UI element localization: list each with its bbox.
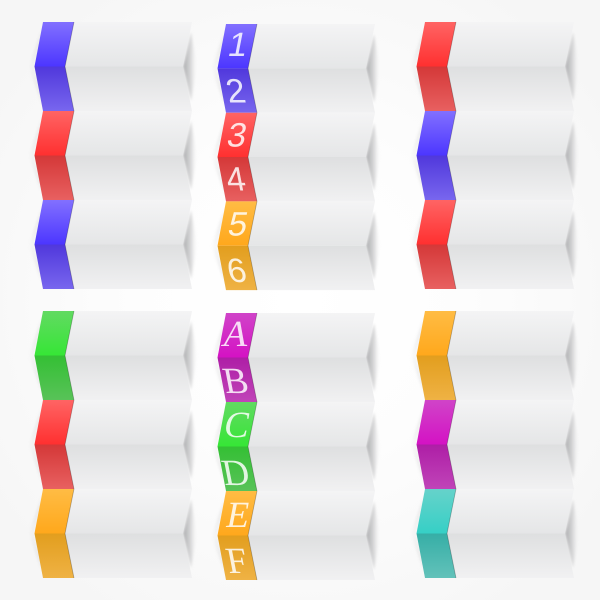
number 1: 1 bbox=[225, 26, 251, 64]
number 4: 4 bbox=[223, 161, 249, 198]
letter C: C bbox=[221, 405, 253, 446]
number 5: 5 bbox=[225, 206, 251, 243]
number 3: 3 bbox=[224, 117, 250, 154]
letter D: D bbox=[218, 453, 253, 494]
panel: numbered list, top centre bbox=[211, 24, 380, 290]
number 6: 6 bbox=[224, 252, 250, 290]
panel: red blue red list, top right bbox=[410, 22, 579, 289]
letter E: E bbox=[223, 495, 253, 536]
panel: orange purple teal list, bottom right bbox=[410, 311, 579, 578]
panel: blue red blue list, top left bbox=[28, 22, 197, 289]
panel: lettered list, bottom centre bbox=[211, 313, 380, 582]
letter B: B bbox=[220, 361, 252, 402]
number 2: 2 bbox=[223, 73, 249, 111]
letter A: A bbox=[219, 314, 254, 355]
letter F: F bbox=[223, 541, 251, 582]
panel: green red orange list, bottom left bbox=[28, 311, 197, 578]
